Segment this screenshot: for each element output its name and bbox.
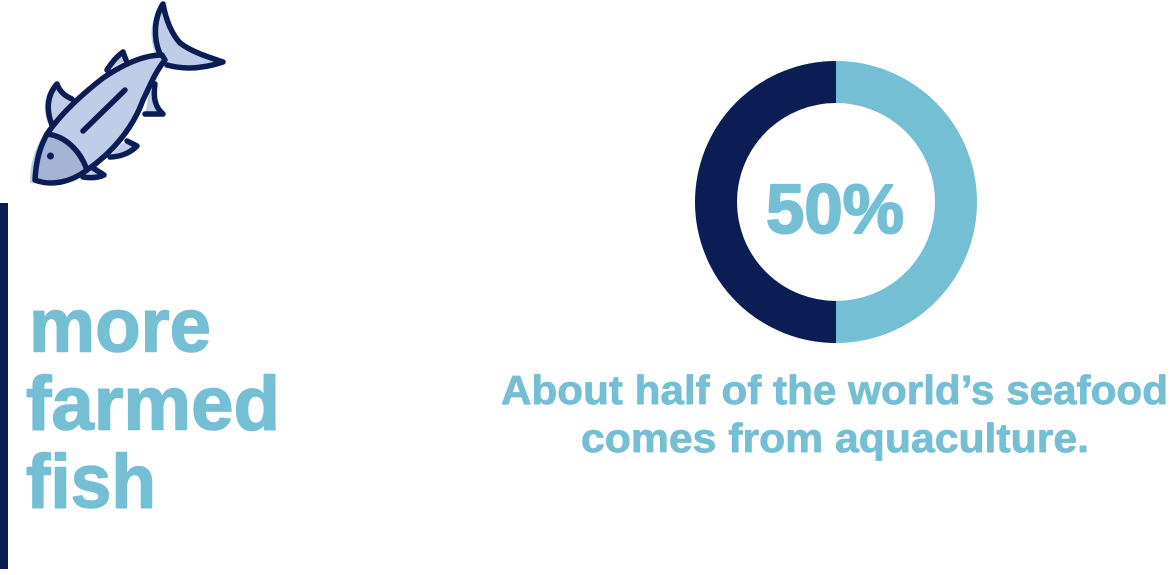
heading: more farmed fish: fish: [26, 440, 156, 524]
donut value: 50%: [766, 170, 904, 248]
heading: more farmed fish: more: [29, 284, 211, 368]
fish shadow fills: [30, 5, 222, 184]
donut chart: 50%: [716, 82, 956, 322]
caption: comes from aquaculture.: [581, 415, 1089, 461]
caption: [501, 367, 1168, 461]
heading: more farmed fish: [26, 284, 280, 524]
segment: aquaculture half: [836, 82, 956, 322]
fish head shade: [35, 134, 87, 183]
caption: About half of the world’s seafood: [501, 367, 1168, 413]
vertical accent bar: [0, 203, 8, 569]
fish eye: [47, 152, 54, 160]
heading: more farmed fish: farmed: [26, 362, 280, 446]
segment: remaining half: [716, 82, 836, 322]
fish outline: [35, 4, 223, 183]
icon: fish: [30, 4, 223, 184]
